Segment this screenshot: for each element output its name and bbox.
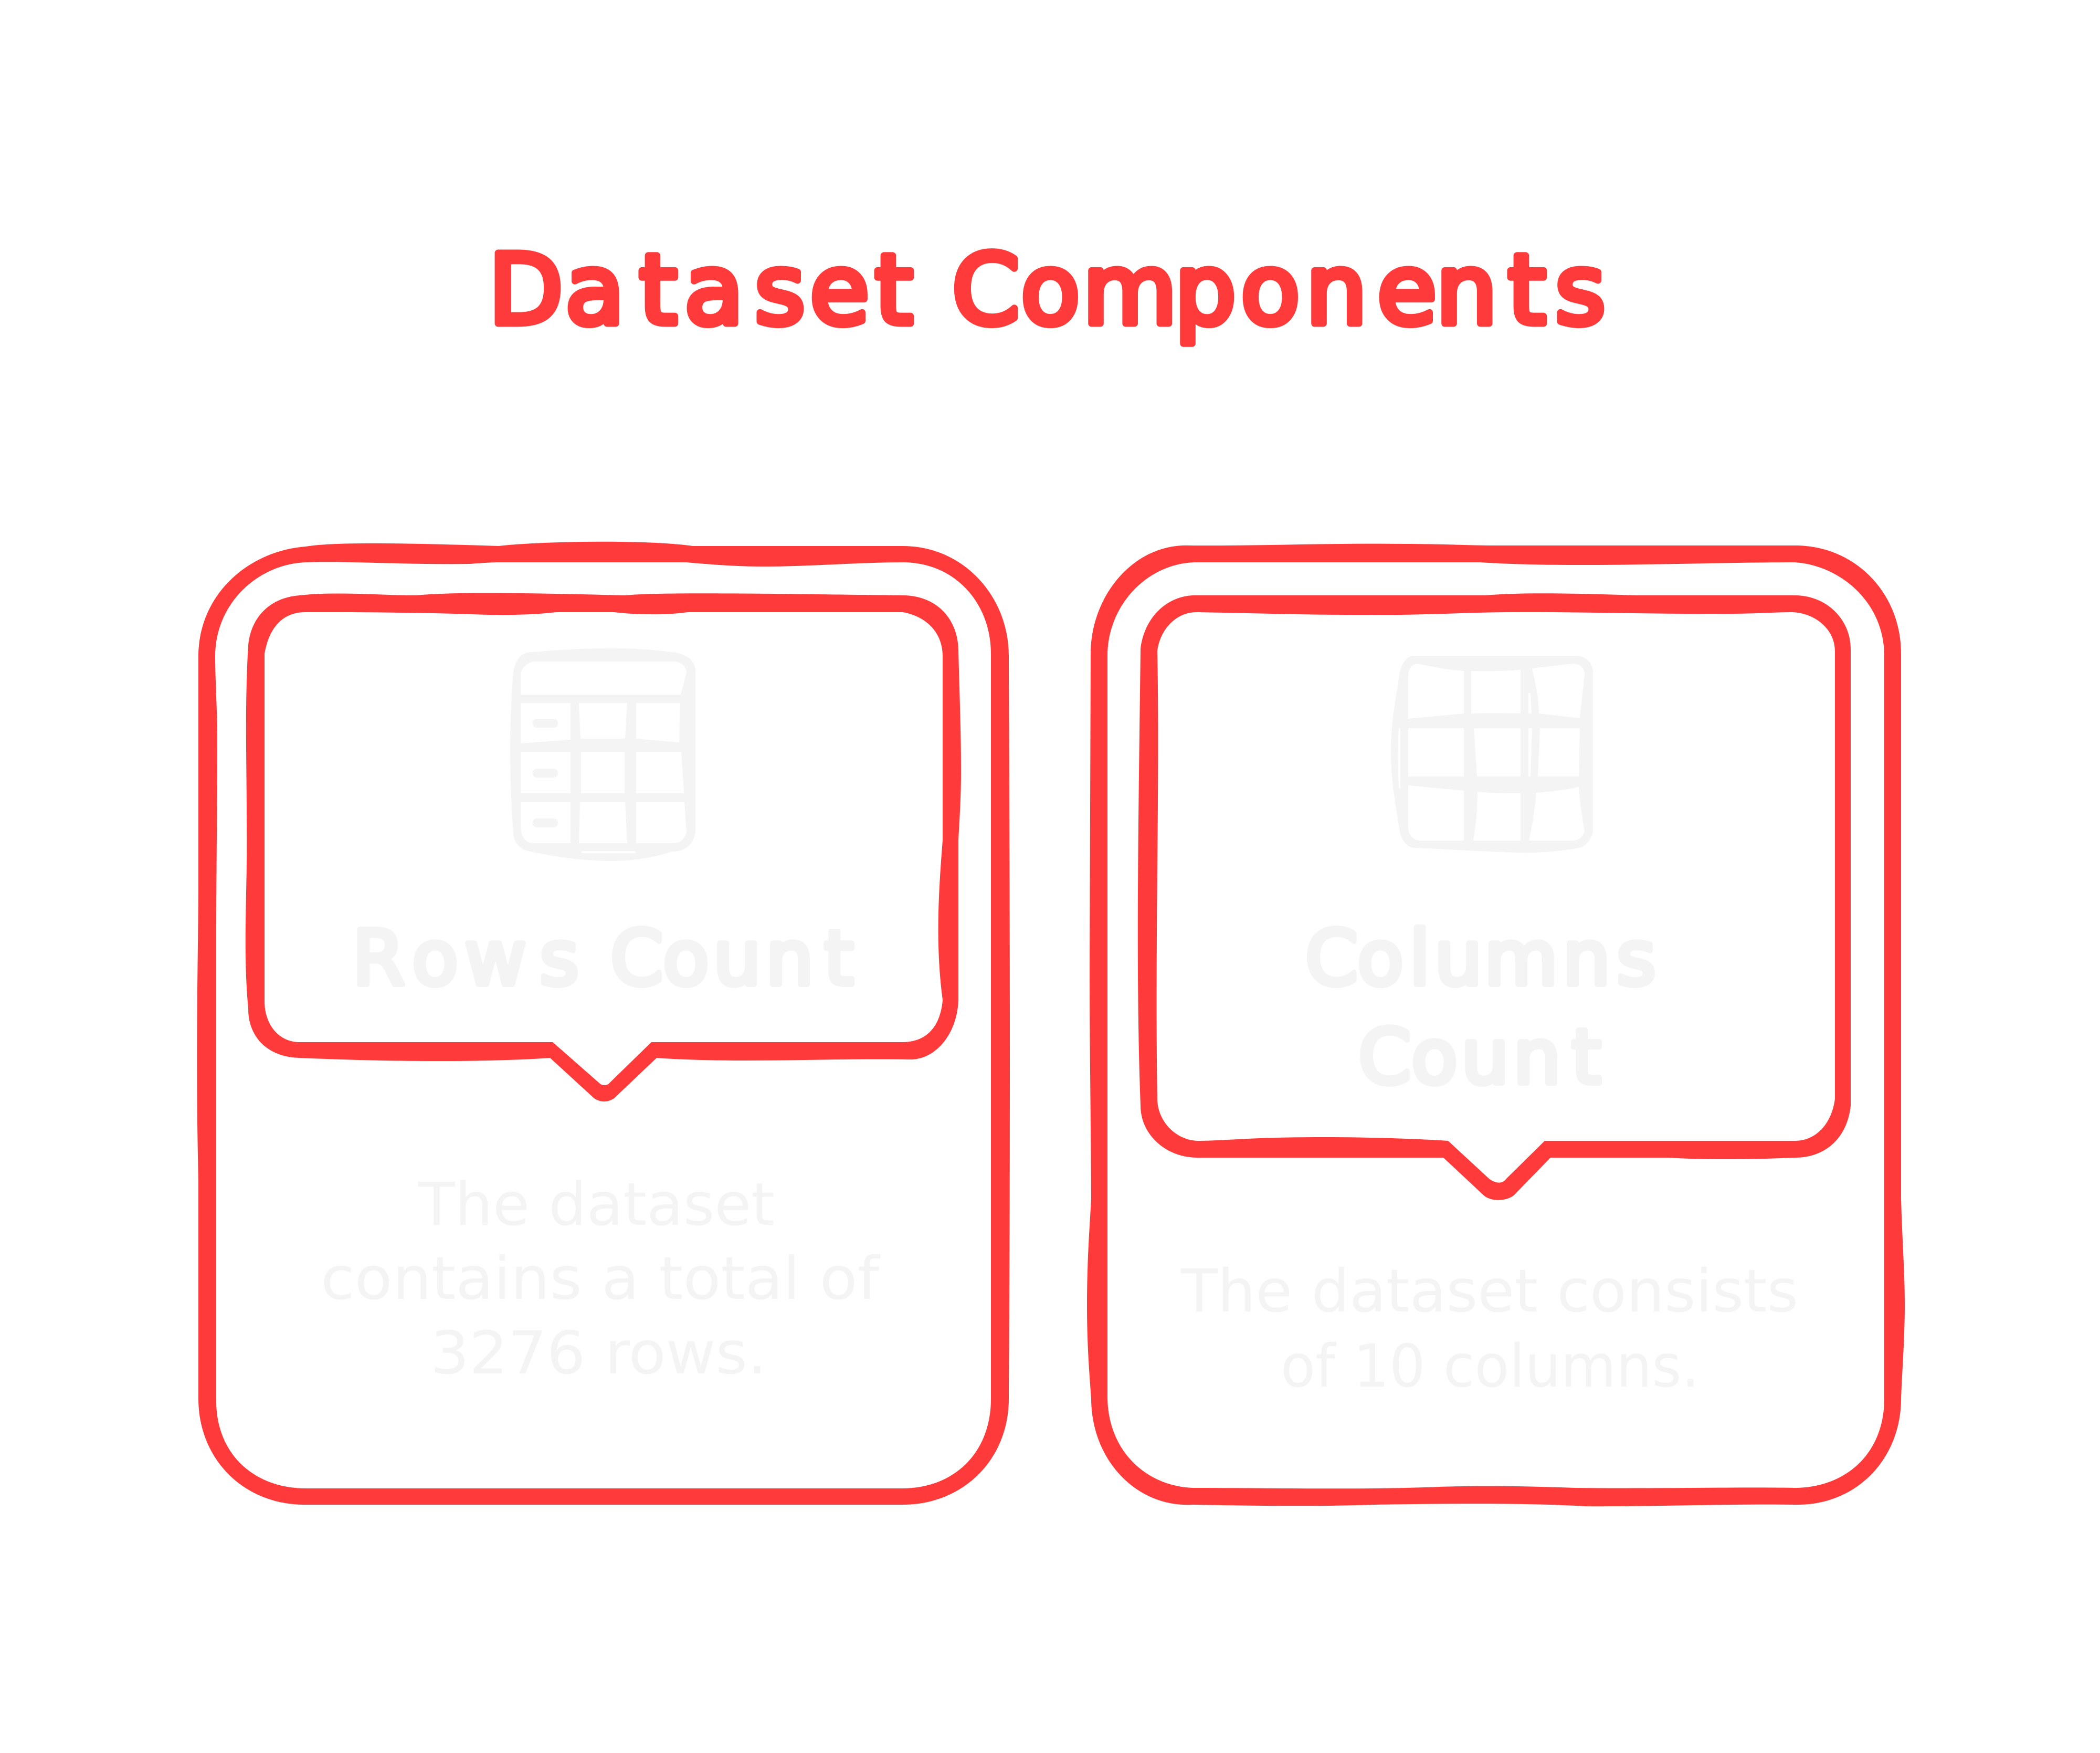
- text block: rows description: [321, 1171, 881, 1388]
- title: Dataset Components: [489, 234, 1606, 347]
- text block: columns description: [1180, 1257, 1798, 1401]
- speech bubble outline: rows: [246, 593, 961, 1101]
- text block: columns description: of 10 columns.: [1281, 1332, 1700, 1401]
- icon: table with columns: [1391, 656, 1593, 853]
- speech bubble outline: columns: [1138, 593, 1851, 1200]
- text block: columns description: The dataset consists: [1180, 1257, 1798, 1326]
- text block: rows description: contains a total of: [321, 1245, 881, 1313]
- text block: rows description: The dataset: [418, 1171, 775, 1239]
- heading: columns count: [1305, 914, 1656, 1101]
- heading: columns count: Columns: [1305, 914, 1656, 1002]
- card outline: columns: [1087, 544, 1905, 1506]
- panel: rows count: [197, 542, 1010, 1505]
- heading: rows count: Rows Count: [352, 914, 853, 1002]
- text block: rows description: 3276 rows.: [430, 1319, 767, 1388]
- icon: table with rows: [510, 648, 695, 861]
- panel: columns count: [1087, 544, 1905, 1506]
- card outline: rows: [197, 542, 1010, 1505]
- heading: columns count: Count: [1358, 1013, 1601, 1101]
